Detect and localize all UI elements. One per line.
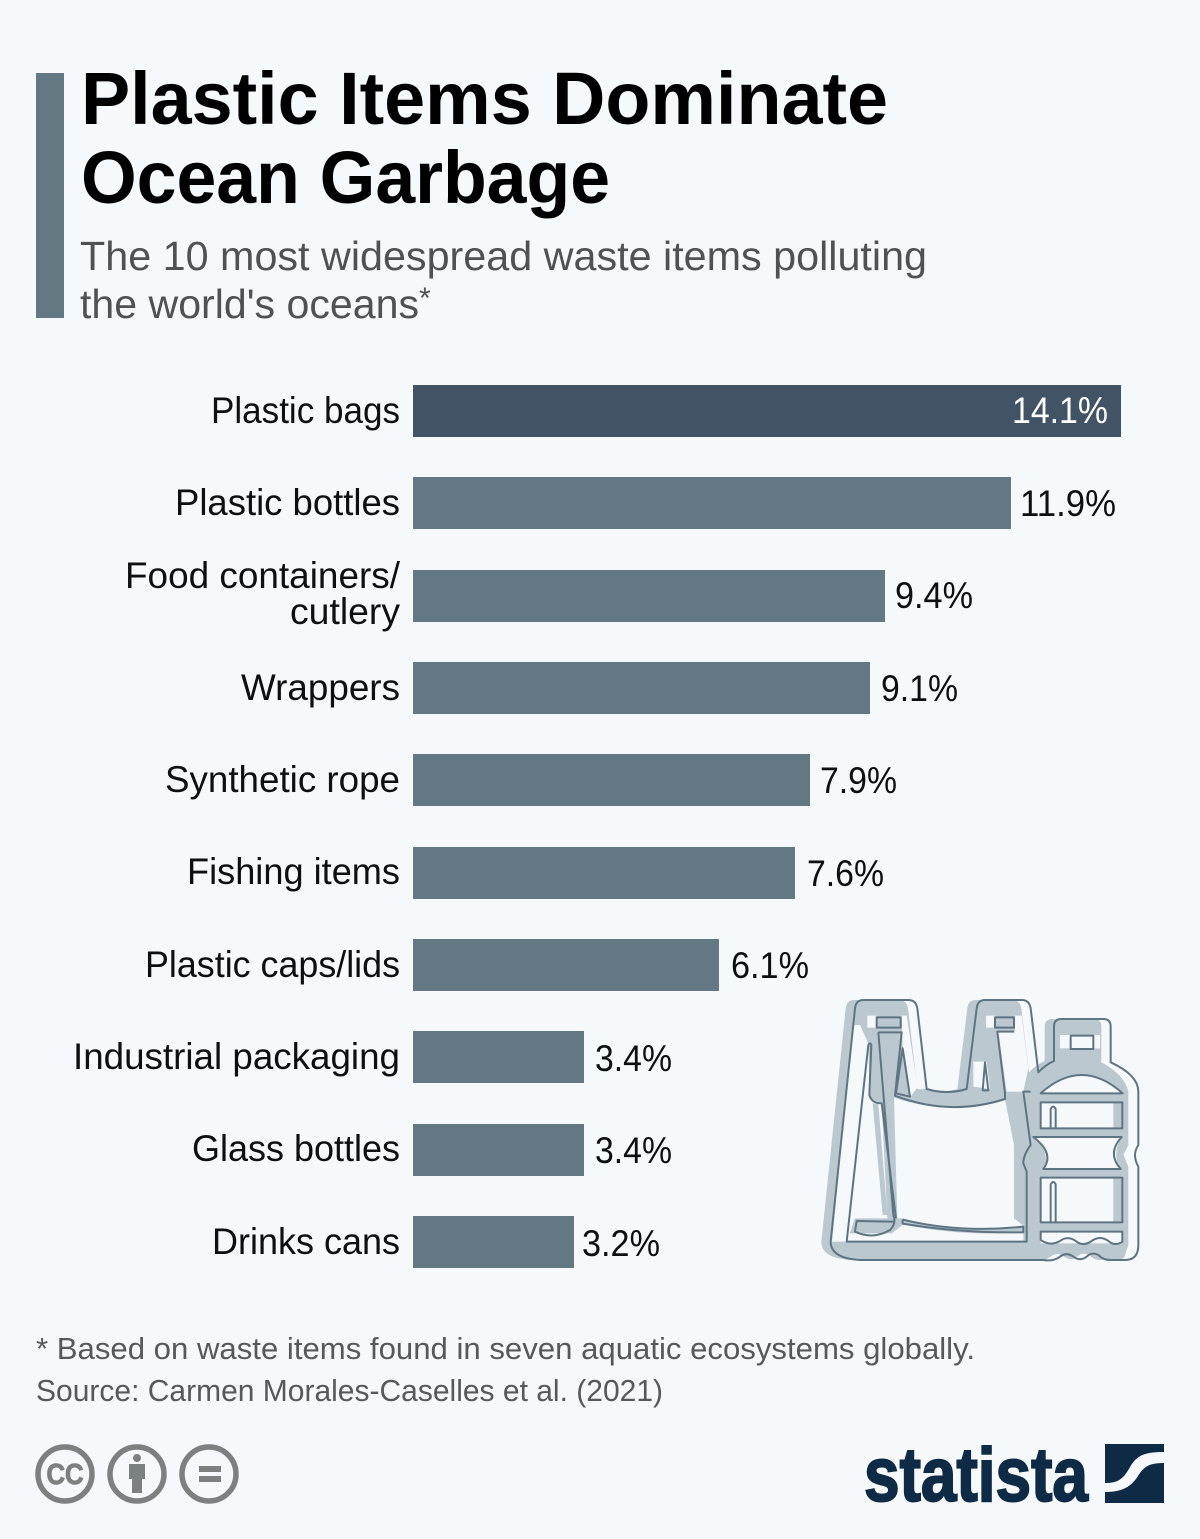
- bar: Wrappers: [241, 662, 958, 714]
- bar: Industrial packaging: Industrial packaging: [73, 1036, 400, 1077]
- bar: Industrial packaging: [73, 1031, 672, 1083]
- icon: creative commons licence: [38, 1447, 236, 1501]
- bar: Glass bottles: Glass bottles: [192, 1128, 400, 1169]
- bar: Food containers/cutlery: [125, 555, 973, 632]
- bar: Synthetic rope: 7.9%: [820, 760, 897, 801]
- logo: statista mark: [1105, 1444, 1164, 1503]
- icon: no derivatives: [182, 1447, 236, 1501]
- subtitle: *: [419, 282, 431, 315]
- bar: Plastic caps/lids: Plastic caps/lids: [145, 944, 400, 985]
- bar: Synthetic rope: [165, 754, 897, 806]
- footnote and source: [36, 1331, 975, 1408]
- footnote and source: Source: Carmen Morales-Caselles et al. (2021): [36, 1373, 663, 1408]
- footnote and source: * Based on waste items found in seven aquatic ecosystems globally.: [36, 1331, 975, 1366]
- bar: Food containers/cutlery: Food containers/: [125, 555, 401, 596]
- title: [81, 57, 888, 219]
- bar: Industrial packaging: 3.4%: [595, 1038, 672, 1079]
- bar: Fishing items: 7.6%: [807, 853, 884, 894]
- subtitle: [80, 233, 927, 327]
- bar: Synthetic rope: Synthetic rope: [165, 759, 400, 800]
- title accent bar: [36, 73, 64, 318]
- bar: Plastic bottles: 11.9%: [1020, 483, 1116, 524]
- logo: statista wordmark: statista: [864, 1433, 1089, 1518]
- icon: plastic bag and bottle: [821, 1000, 1138, 1260]
- icon: CC: [38, 1447, 92, 1501]
- bar: Drinks cans: Drinks cans: [212, 1221, 400, 1262]
- title: Ocean Garbage: [81, 136, 610, 219]
- bar: Drinks cans: [212, 1216, 660, 1268]
- icon: CC: CC: [46, 1459, 84, 1491]
- bar: Glass bottles: 3.4%: [595, 1130, 672, 1171]
- bar: Plastic bottles: Plastic bottles: [175, 482, 400, 523]
- bar: Drinks cans: 3.2%: [582, 1223, 660, 1264]
- bar: Fishing items: [187, 847, 884, 899]
- bar: Plastic bags: Plastic bags: [211, 390, 400, 431]
- bar: Plastic bags: [211, 385, 1121, 437]
- title: Plastic Items Dominate: [81, 57, 888, 140]
- bar: Plastic caps/lids: [145, 939, 809, 991]
- icon: attribution: [110, 1447, 164, 1501]
- subtitle: The 10 most widespread waste items polluting: [80, 233, 927, 279]
- bar: Food containers/cutlery: cutlery: [290, 591, 400, 632]
- bar: Plastic bottles: [175, 477, 1116, 529]
- bar: Wrappers: 9.1%: [881, 668, 958, 709]
- bar: Plastic bags: 14.1%: [1012, 390, 1108, 431]
- bar: Glass bottles: [192, 1124, 672, 1176]
- bar: Wrappers: Wrappers: [241, 667, 400, 708]
- bar: Fishing items: Fishing items: [187, 851, 400, 892]
- subtitle: the world's oceans: [80, 281, 419, 327]
- bar chart: [73, 385, 1121, 1268]
- bar: Plastic caps/lids: 6.1%: [731, 945, 809, 986]
- bar: Food containers/cutlery: 9.4%: [895, 575, 973, 616]
